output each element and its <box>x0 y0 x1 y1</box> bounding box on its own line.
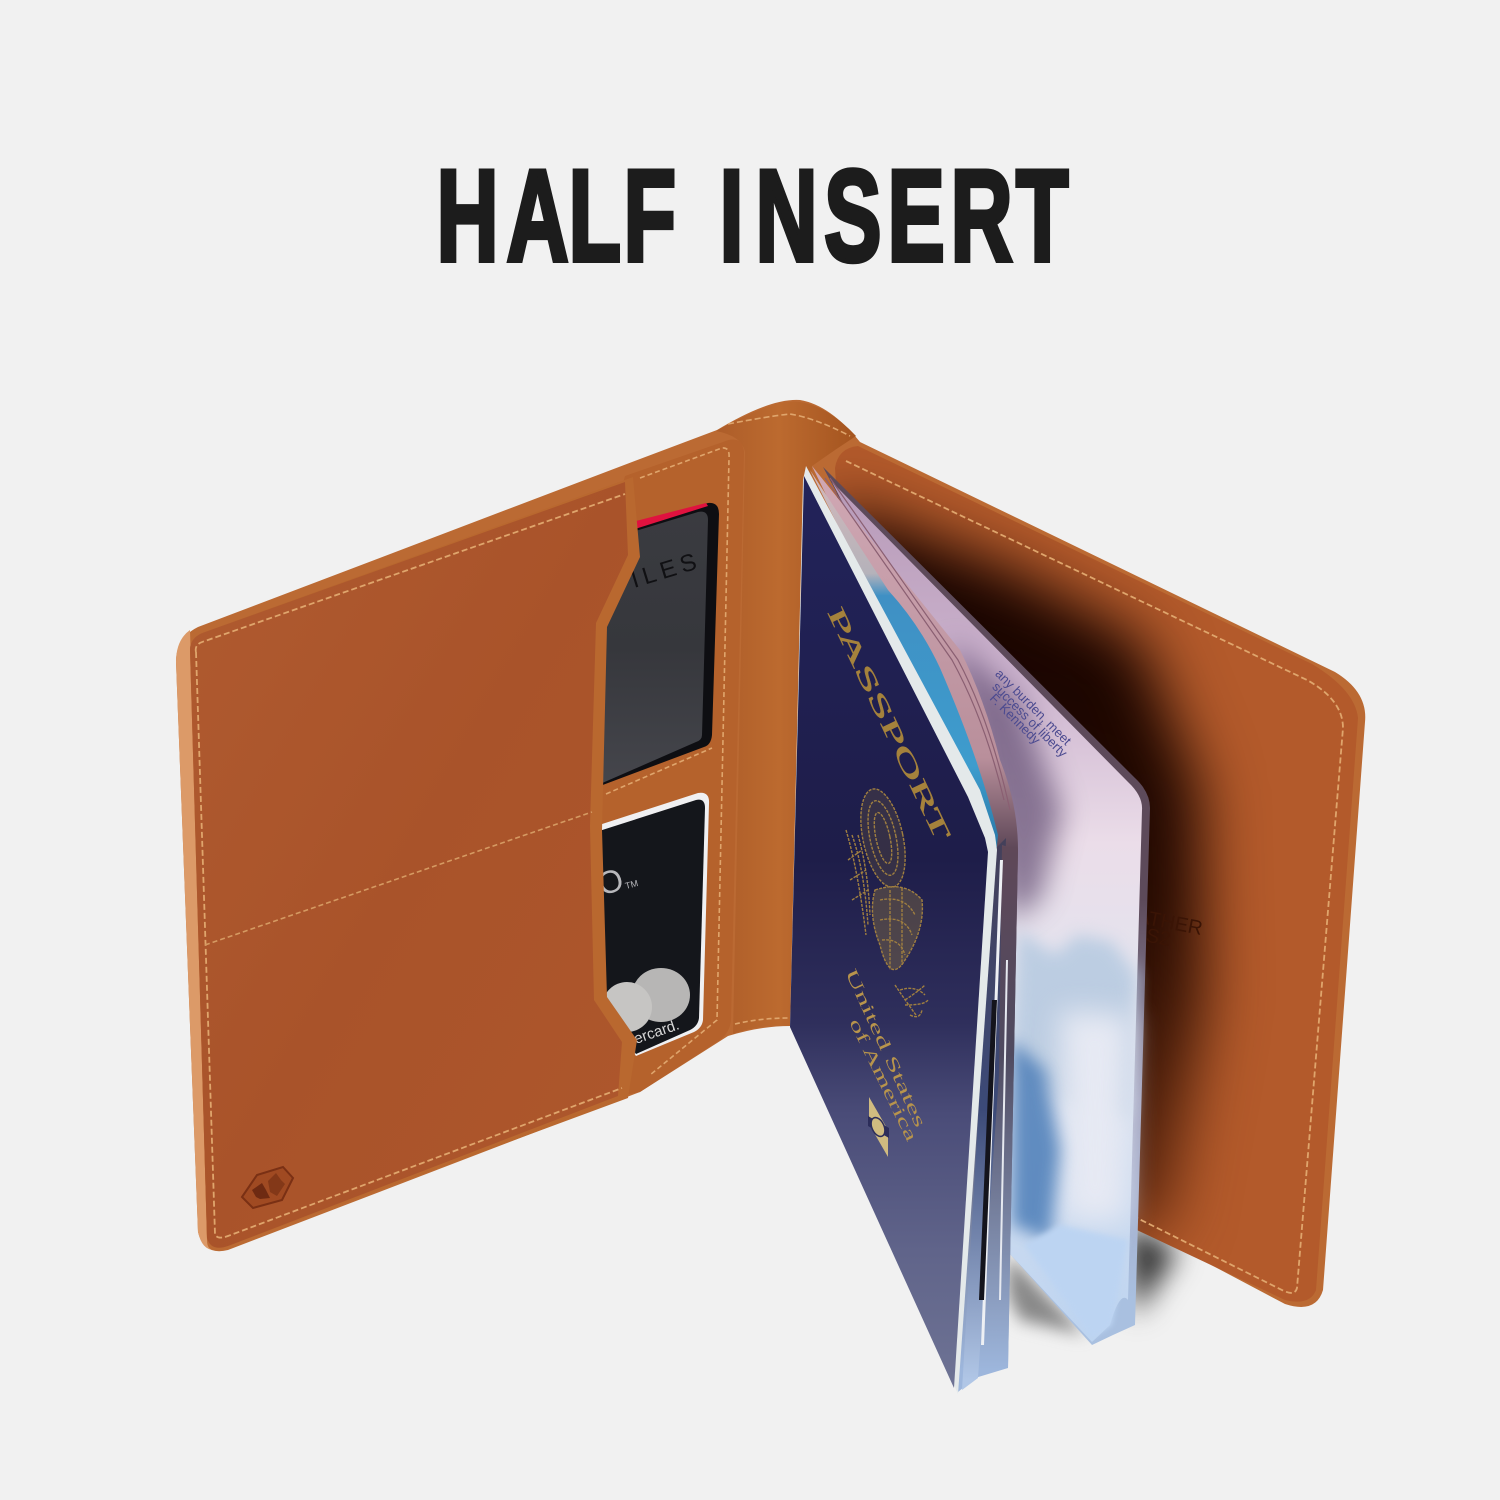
white page edge 2 <box>999 960 1008 1300</box>
cover heading: PASSPORT <box>822 603 955 845</box>
right leather panel <box>830 446 1358 1302</box>
visa quotation text: F. Kennedy <box>987 691 1044 747</box>
lower card <box>593 793 709 1056</box>
passport cover <box>790 466 997 1394</box>
visa page face <box>832 482 1142 1342</box>
passport <box>790 466 1150 1394</box>
cover title line one: United States <box>841 966 930 1130</box>
lower page foil <box>996 845 1018 1368</box>
mastercard wordmark: ercard. <box>632 1017 681 1048</box>
infographic canvas <box>176 167 1366 1394</box>
white page edge <box>981 860 1003 1345</box>
icon: maker logo hexagon <box>242 1167 293 1208</box>
mastercard circles <box>602 968 690 1032</box>
embossed maker text: S2 <box>1144 925 1172 951</box>
dark gap between pages <box>979 1000 997 1300</box>
visa page <box>823 467 1150 1345</box>
biometric chip symbol <box>868 1097 889 1157</box>
card wordmark: ILES <box>628 547 705 594</box>
left pocket <box>190 477 640 1248</box>
pocket divider stitching <box>205 812 592 945</box>
red card edge <box>632 503 708 530</box>
pale centre of artwork <box>1060 1010 1130 1220</box>
mountain artwork <box>1012 930 1136 1120</box>
emblem: eagle <box>846 785 928 1017</box>
right panel stitching <box>846 461 1343 1293</box>
card logo fragment: O <box>593 861 628 903</box>
lower card face <box>596 800 705 1054</box>
cover title line two: of America <box>845 1015 922 1145</box>
card slot panel <box>590 440 744 1100</box>
left panel stitching <box>196 494 625 1238</box>
spine stitching <box>728 414 850 436</box>
cover face <box>790 476 988 1388</box>
pale blue foot <box>1024 1225 1128 1338</box>
page edge lines <box>825 478 1010 810</box>
shadow on visa page <box>950 640 1062 920</box>
embossed maker text: LEATHER <box>1111 901 1204 940</box>
shadow under passport <box>1008 1222 1178 1335</box>
title: HALF INSERT <box>437 144 1068 289</box>
blue printed page <box>810 470 998 900</box>
pocket face <box>190 482 628 1248</box>
blue wash <box>1012 1040 1060 1240</box>
left outer edge highlight <box>176 630 214 1250</box>
leather wallet <box>176 400 1365 1307</box>
visa quotation text: any burden, meet <box>992 666 1075 748</box>
second shadow patch <box>1125 1222 1178 1316</box>
upper card <box>600 503 719 786</box>
lower page stack <box>962 838 1006 1390</box>
panel shadow cast by passport <box>830 500 1205 1240</box>
divider stitching <box>606 748 712 794</box>
page block <box>810 466 1018 1392</box>
upper card face <box>600 512 708 784</box>
spine bottom stitching <box>735 1018 790 1024</box>
visa quotation text: success of liberty <box>989 679 1071 760</box>
trademark: TM <box>624 878 639 891</box>
wallet outer silhouette <box>176 400 1365 1307</box>
slot panel stitching <box>640 448 729 1075</box>
spine <box>716 402 856 1034</box>
